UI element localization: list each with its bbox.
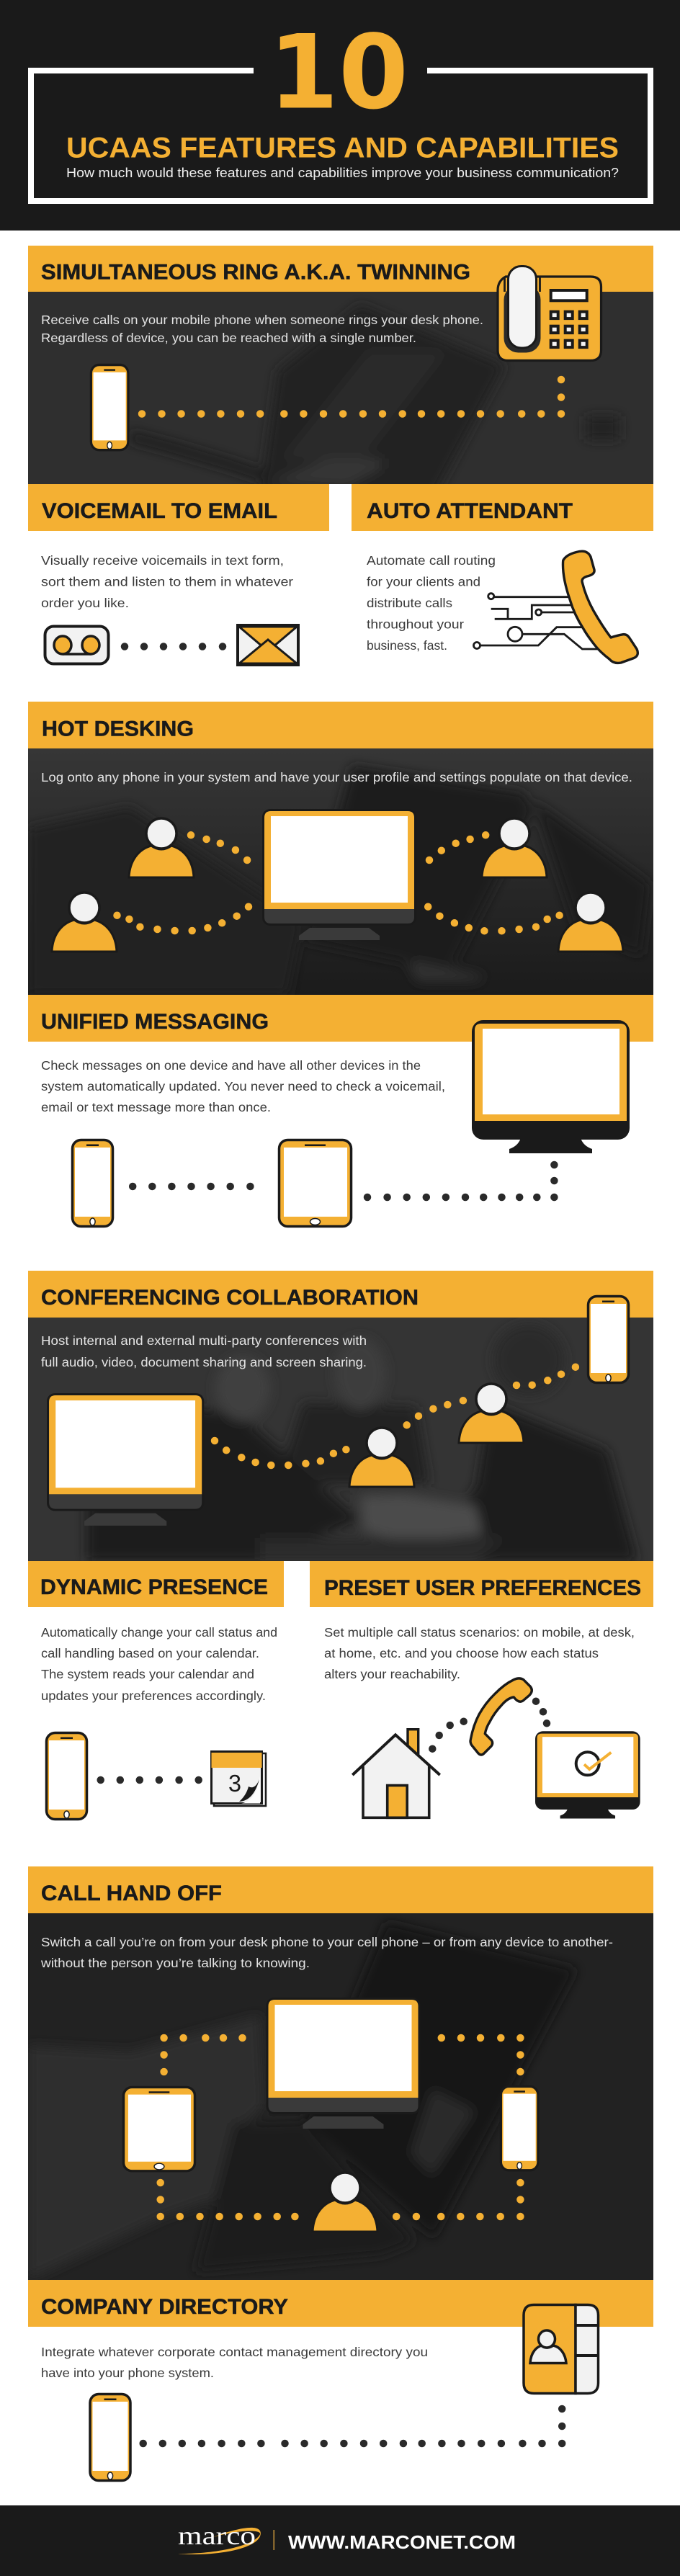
heading bar (28, 1271, 653, 1318)
website url: WWW.MARCONET.COM (288, 2531, 516, 2553)
icon: envelope (238, 625, 298, 665)
icon: address book (524, 2305, 598, 2393)
heading: company directory: COMPANY DIRECTORY (41, 2295, 288, 2319)
description: order you like. (41, 596, 129, 610)
icon: tablet (123, 2087, 194, 2171)
icon: person right (459, 1384, 524, 1443)
description (41, 1058, 445, 1114)
dotted connectors (117, 835, 560, 931)
icon: person top right (482, 818, 547, 877)
description: Check messages on one device and have all other devices in the (41, 1058, 421, 1073)
icon: person (313, 2173, 377, 2232)
icon: phone (46, 1733, 86, 1820)
subtitle: How much would these features and capabilities improve your business communication? (66, 165, 619, 180)
photo background: desk phone (28, 292, 653, 497)
panel: company directory (28, 2280, 653, 2481)
icon: desk phone (498, 267, 601, 360)
description: full audio, video, document sharing and screen sharing. (41, 1355, 367, 1369)
heading: preset user preferences: PRESET USER PREFERENCES (324, 1576, 641, 1600)
heading bar (28, 1866, 653, 1913)
description (324, 1625, 635, 1681)
icon: voicemail tape (45, 627, 108, 664)
heading: conferencing collaboration: CONFERENCING COLLABORATION (41, 1286, 419, 1310)
icon: phone (90, 2394, 130, 2481)
heading: hot desking: HOT DESKING (42, 717, 194, 741)
logo: marco (178, 2521, 261, 2554)
icon: person left (349, 1428, 414, 1487)
description: The system reads your calendar and (41, 1667, 254, 1681)
panel: preset user preferences (310, 1561, 653, 1818)
panel: auto attendant (352, 484, 653, 663)
main title: UCAAS FEATURES AND CAPABILITIES (66, 133, 619, 164)
icon: person bottom left (52, 893, 117, 952)
panel: unified messaging (28, 995, 653, 1226)
panel: hot desking (28, 702, 653, 995)
photo background: meeting (28, 1318, 653, 1561)
description (41, 553, 293, 610)
photo background: desk with tablet (28, 748, 653, 995)
icon: house (352, 1730, 440, 1817)
header frame (31, 71, 650, 201)
dotted connectors (161, 2038, 520, 2217)
heading bar (28, 484, 329, 531)
icon: monitor with check mark (535, 1731, 640, 1818)
description: Host internal and external multi-party conferences with (41, 1333, 367, 1348)
description: call handling based on your calendar. (41, 1646, 259, 1660)
heading: dynamic presence: DYNAMIC PRESENCE (40, 1575, 268, 1599)
big number 10: 10 (269, 13, 408, 133)
description: throughout your (367, 617, 464, 631)
description: without the person you’re talking to knowing. (40, 1956, 310, 1970)
description (41, 1333, 367, 1369)
panel: simultaneous ring (28, 246, 653, 497)
icon: calendar: 3 (228, 1770, 241, 1797)
icon: tablet (279, 1140, 352, 1226)
dotted connector (142, 380, 561, 413)
icon: calendar (212, 1752, 266, 1806)
heading: unified messaging: UNIFIED MESSAGING (41, 1010, 269, 1034)
panel: conferencing collaboration (28, 1271, 653, 1561)
description: sort them and listen to them in whatever (41, 575, 293, 589)
description: Regardless of device, you can be reached with a single number. (41, 331, 416, 345)
icon: circuit lines (474, 594, 601, 649)
dotted connectors (215, 1367, 576, 1465)
logo: marco: marco (178, 2521, 256, 2550)
panel: call hand off (28, 1866, 653, 2280)
description: Set multiple call status scenarios: on mobile, at desk, (324, 1625, 635, 1640)
header banner (0, 0, 680, 231)
heading bar (28, 2280, 653, 2327)
description: updates your preferences accordingly. (41, 1689, 266, 1703)
description (40, 1935, 613, 1970)
description: Automatically change your call status and (41, 1625, 277, 1640)
icon: phone (72, 1140, 112, 1226)
description: Switch a call you’re on from your desk phone to your cell phone – or from any device to another- (41, 1935, 613, 1949)
photo background: laptop (28, 1913, 653, 2280)
panel: voicemail to email (28, 484, 329, 665)
description (41, 2345, 428, 2380)
dotted connector (101, 1776, 199, 1784)
icon: monitor (472, 1020, 630, 1153)
dotted connectors (133, 1165, 554, 1197)
heading bar (352, 484, 653, 531)
icon: telephone handset (563, 551, 638, 663)
heading: auto attendant: AUTO ATTENDANT (367, 499, 573, 523)
icon: monitor (262, 809, 416, 940)
icon: monitor (47, 1393, 204, 1526)
description: email or text message more than once. (41, 1100, 271, 1114)
icon: mobile phone (91, 365, 128, 450)
heading bar (28, 702, 653, 748)
description: alters your reachability. (324, 1667, 460, 1681)
description: Integrate whatever corporate contact management directory you (41, 2345, 428, 2359)
heading: call hand off: CALL HAND OFF (41, 1882, 222, 1905)
heading: simultaneous ring: SIMULTANEOUS RING A.K.A. TWINNING (41, 261, 470, 285)
description (41, 313, 483, 345)
description: have into your phone system. (41, 2366, 214, 2380)
dotted connector (143, 2409, 562, 2443)
description: for your clients and (367, 575, 480, 589)
heading bar (28, 1561, 284, 1607)
heading bar (28, 995, 653, 1042)
description: Automate call routing (367, 553, 496, 568)
description: distribute calls (367, 596, 452, 610)
panel: dynamic presence (28, 1561, 284, 1820)
description (367, 553, 496, 653)
description: business, fast. (367, 638, 447, 653)
dotted connectors (432, 1701, 547, 1749)
icon: telephone handset (470, 1678, 532, 1755)
description (41, 1625, 277, 1703)
description: system automatically updated. You never need to check a voicemail, (41, 1079, 445, 1094)
description: Visually receive voicemails in text form, (41, 553, 284, 568)
description: Receive calls on your mobile phone when someone rings your desk phone. (41, 313, 483, 327)
heading: voicemail to email: VOICEMAIL TO EMAIL (42, 499, 277, 523)
icon: phone (588, 1297, 628, 1383)
footer (0, 2505, 680, 2576)
description: at home, etc. and you choose how each status (324, 1646, 599, 1660)
heading bar (310, 1561, 653, 1607)
dotted connector (125, 643, 223, 650)
icon: person bottom right (558, 893, 623, 952)
icon: person top left (129, 818, 194, 877)
heading bar (28, 246, 653, 292)
description: Log onto any phone in your system and have your user profile and settings populate on that device. (41, 770, 632, 784)
icon: phone (501, 2086, 538, 2170)
icon: monitor (267, 1998, 421, 2129)
